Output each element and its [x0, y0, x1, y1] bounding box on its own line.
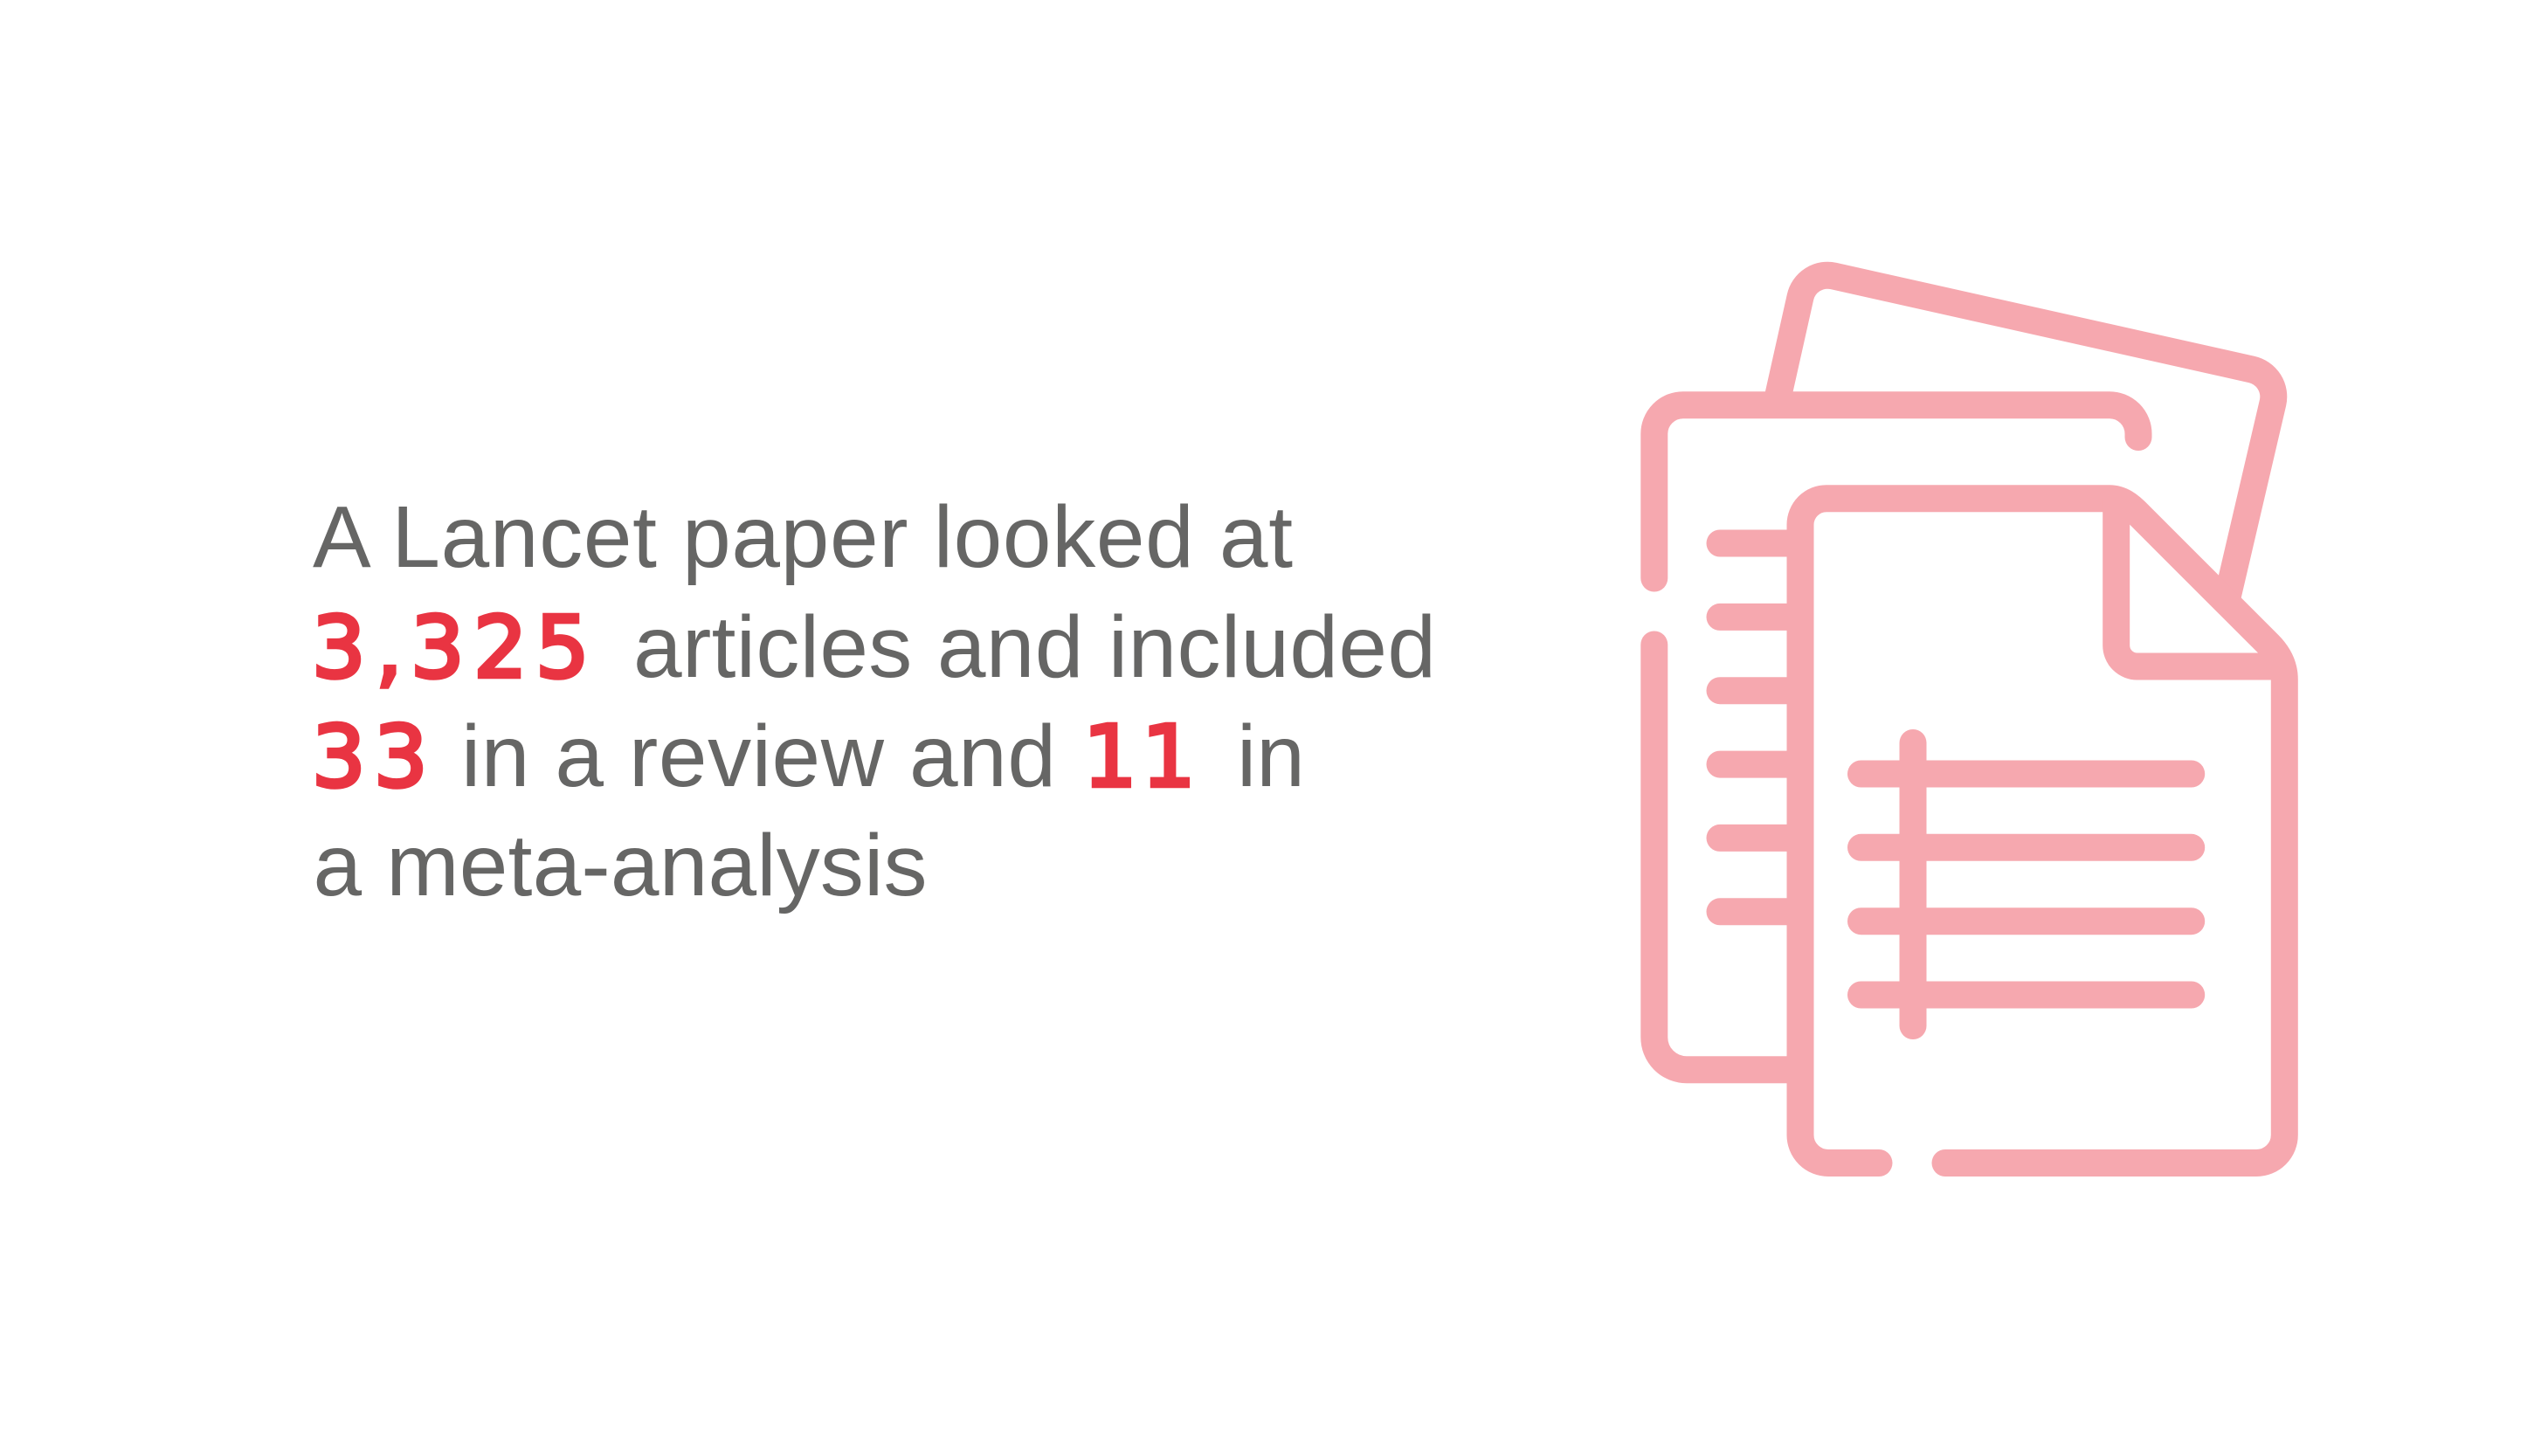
front page folded corner: [2116, 498, 2284, 666]
icon: stack of documents: [1654, 275, 2284, 1163]
front page text lines: [1861, 774, 2192, 995]
line 2 text: articles and included: [633, 598, 1436, 696]
line 1: A Lancet paper looked at: [313, 488, 1293, 586]
middle page outline: [1654, 405, 2138, 578]
front page outline: [1800, 499, 2284, 1163]
number: 33: 33: [312, 707, 428, 806]
middle page ticks: [1720, 543, 1800, 912]
line 3 trailing text: in: [1237, 707, 1305, 805]
statement text block: [312, 488, 1436, 914]
front page vertical rule: [1899, 742, 1927, 1025]
line 3 text: in a review and: [461, 707, 1056, 805]
rotated back page: [1777, 275, 2274, 601]
number: 11: 11: [1083, 707, 1196, 806]
line 4: a meta-analysis: [313, 817, 928, 914]
number: 3,325: 3,325: [312, 598, 590, 697]
